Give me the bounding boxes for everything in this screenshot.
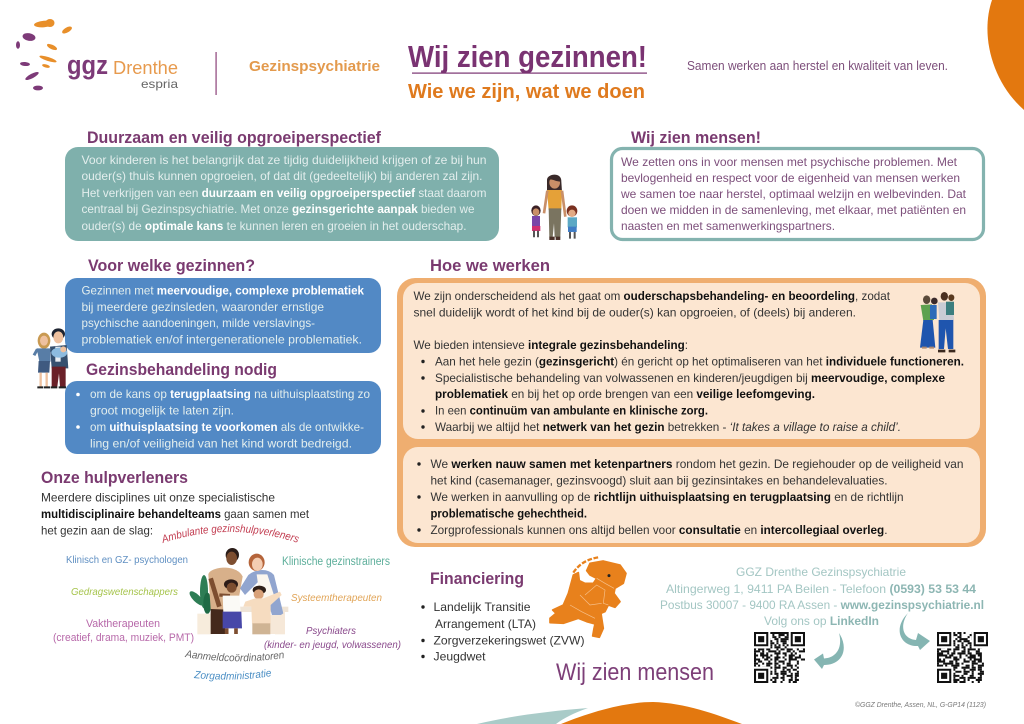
map: Netherlands (550, 557, 626, 637)
heading: Gezinsbehandeling nodig (86, 361, 277, 379)
contact details: Postbus 30007 - 9400 RA Assen - www.gezinspsychiatrie.nl (660, 598, 984, 612)
text block: behandeling (414, 289, 964, 434)
panel: gezinsbehandeling nodig: om de kans op terugplaatsing na uithuisplaatsting zo (90, 387, 370, 401)
panel: gezinsbehandeling nodig: ling en/of veiligheid van het kind wordt bedreigd. (90, 436, 352, 450)
list: financiering: Arrangement (LTA) (435, 617, 536, 631)
text block: behandeling: Specialistische behandeling van volwassenen en kinderen/jeugdigen bij meervoudige, complexe (435, 371, 945, 385)
department name: Gezinspsychiatrie (249, 58, 380, 75)
bottom wave shapes (477, 702, 742, 724)
panel: voor welke gezinnen: Gezinnen met meervoudige, complexe problematiek (82, 284, 364, 298)
label: psychiaters: (kinder- en jeugd, volwassenen) (264, 639, 401, 651)
label: psychiaters: Psychiaters (306, 625, 357, 637)
contact details: GGZ Drenthe Gezinspsychiatrie (736, 565, 906, 579)
section: onze hulpverleners intro (41, 469, 310, 538)
panel: voor welke gezinnen: psychische aandoeningen, milde verslavings- (82, 316, 315, 330)
text block: behandeling: snel duidelijk wordt of het kind bij de ouder(s) kan opgroeien, of (deels) bij anderen. (414, 306, 856, 320)
logo: GGZ Drenthe espria: Drenthe (113, 58, 178, 78)
label: gedragswetenschappers: Gedragswetenschappers (71, 586, 179, 598)
panel: gezinsbehandeling nodig: groot mogelijk te laten zijn. (90, 404, 234, 418)
text block: samenwerking: het kind (casemanager, gezinsvoogd) sluit aan bij gezinsintakes en behandelevaluaties. (430, 474, 888, 488)
panel: voor welke gezinnen: bij meerdere gezinsleden, waaronder ernstige (82, 300, 324, 314)
logo: GGZ Drenthe espria: ggz (67, 50, 108, 80)
panel: voor welke gezinnen (65, 257, 381, 353)
panel: duurzaam en veilig opgroeiperspectief: Voor kinderen is het belangrijk dat ze tijdig duidelijkheid krijgen of ze bij hun (82, 153, 486, 167)
label: vaktherapeuten: Vaktherapeuten (86, 618, 160, 630)
label: systeemtherapeuten: Systeemtherapeuten (291, 592, 382, 604)
label: psychiaters (264, 625, 401, 651)
heading: Voor welke gezinnen? (88, 257, 255, 275)
contact details: Volg ons op LinkedIn (764, 614, 879, 628)
text block: behandeling: problematiek en bij het op orde brengen van een veilige leefomgeving. (435, 387, 815, 401)
QR code: LinkedIn (754, 632, 805, 683)
heading: Wij zien mensen! (631, 129, 761, 147)
text block: behandeling: Waarbij we altijd het netwerk van het gezin betrekken - ‘It takes a village to raise a child’. (435, 420, 901, 434)
list: financiering: Jeugdwet (434, 650, 486, 664)
heading: hoe we werken: Hoe we werken (430, 257, 550, 275)
label: klinische gezinstrainers: Klinische gezinstrainers (282, 556, 390, 568)
panel: duurzaam en veilig opgroeiperspectief: Het verkrijgen van een duurzaam en veilig opgroeiperspectief staat daarom (82, 186, 486, 200)
panel: wij zien mensen: We zetten ons in voor mensen met psychische problemen. Met (621, 155, 958, 169)
text block: behandeling: Aan het hele gezin (gezinsgericht) én gericht op het optimaliseren van het individuele functioneren. (435, 354, 964, 368)
copyright: ©GGZ Drenthe, Assen, NL, G-GP14 (1123) (855, 700, 986, 709)
icon: mother with two children (531, 175, 577, 240)
slogan: wij zien mensen: Wij zien mensen (556, 659, 714, 686)
logo: GGZ Drenthe espria (16, 19, 178, 91)
label: vaktherapeuten: (creatief, drama, muziek, PMT) (53, 632, 194, 644)
title: Wij zien gezinnen! (408, 39, 647, 74)
label: vaktherapeuten (53, 618, 194, 644)
contact details: Altingerweg 1, 9411 PA Beilen - Telefoon (0593) 53 53 44 (666, 582, 976, 596)
panel: wij zien mensen: doen we midden in de samenleving, met elkaar, met patiënten en (621, 203, 966, 217)
text block: samenwerking: Zorgprofessionals kunnen ons altijd bellen voor consultatie en intercollegiaal overleg. (430, 523, 888, 537)
heading: financiering: Financiering (430, 570, 524, 588)
heading: Duurzaam en veilig opgroeiperspectief (87, 129, 381, 147)
panel: duurzaam en veilig opgroeiperspectief: ouder(s) de optimale kans te kunnen leren en groeien in het ouderschap. (82, 219, 466, 233)
icon: couple carrying children (920, 292, 955, 351)
illustration: family with caregivers (187, 548, 288, 634)
logo: GGZ Drenthe espria: espria (141, 77, 178, 91)
tagline: Samen werken aan herstel en kwaliteit van leven. (687, 59, 948, 73)
section: onze hulpverleners intro: Meerdere disciplines uit onze specialistische (41, 490, 275, 504)
label: zorgadministratie: Zorgadministratie (194, 669, 271, 682)
text block: samenwerking (417, 457, 964, 537)
panel: wij zien mensen: we samen toe naar herstel, optimaal welzijn en welbevinden. Dat (620, 187, 967, 201)
icon: parents with baby (34, 328, 68, 387)
label: ambulante gezinshulpverleners: Ambulante gezinshulpverleners (162, 524, 299, 544)
arrow: to LinkedIn QR (814, 633, 844, 669)
panel: duurzaam en veilig opgroeiperspectief: ouder(s) thuis kunnen opgroeien, of dat dit (gedeeltelijk) bij anderen zal zijn. (82, 169, 482, 183)
subtitle: Wie we zijn, wat we doen (408, 80, 645, 103)
text block: behandeling: We zijn onderscheidend als het gaat om ouderschapsbehandeling- en beoordeling, zodat (414, 289, 891, 303)
panel: voor welke gezinnen: problematiek en/of intergenerationele problematiek. (82, 332, 362, 346)
label: aanmeldcoordinatoren: Aanmeldcoördinatoren (184, 650, 284, 662)
text block: behandeling: In een continuüm van ambulante en klinische zorg. (435, 404, 708, 418)
QR code: website (937, 632, 988, 683)
section: onze hulpverleners intro: multidisciplinaire behandelteams gaan samen met (41, 507, 310, 521)
panel: wij zien mensen: bevlogenheid en respect voor de eigenheid van mensen werken (621, 171, 960, 185)
list: financiering (421, 600, 584, 664)
contact details (660, 565, 984, 628)
text block: samenwerking: We werken in aanvulling op de richtlijn uithuisplaatsing en terugplaatsing en de richtlijn (430, 490, 904, 504)
text block: samenwerking: We werken nauw samen met ketenpartners rondom het gezin. De regiehouder op de veiligheid van (430, 457, 964, 471)
text block: samenwerking: problematische gehechtheid. (430, 506, 587, 520)
label: klinisch en gz-psychologen: Klinisch en GZ- psychologen (66, 554, 188, 566)
section: onze hulpverleners intro: het gezin aan de slag: (41, 524, 153, 538)
arrow: to website QR (900, 613, 930, 650)
panel: duurzaam en veilig opgroeiperspectief (65, 129, 499, 241)
panel: wij zien mensen (612, 129, 984, 240)
text block: behandeling: We bieden intensieve integrale gezinsbehandeling: (414, 338, 688, 352)
panel: duurzaam en veilig opgroeiperspectief: centraal bij Gezinspsychiatrie. Met onze gezinsgerichte aanpak bieden we (82, 202, 475, 216)
heading: Onze hulpverleners (41, 469, 188, 487)
list: financiering: Landelijk Transitie (434, 600, 531, 614)
panel: wij zien mensen: naasten en met samenwerkingspartners. (621, 219, 835, 233)
decorative orange corner shape (987, 0, 1024, 110)
list: financiering: Zorgverzekeringswet (ZVW) (434, 634, 584, 648)
panel: gezinsbehandeling nodig: om uithuisplaatsing te voorkomen als de ontwikke- (90, 420, 364, 434)
panel: hoe we werken (397, 278, 986, 547)
logo divider (215, 52, 217, 95)
panel: gezinsbehandeling nodig (65, 361, 381, 454)
